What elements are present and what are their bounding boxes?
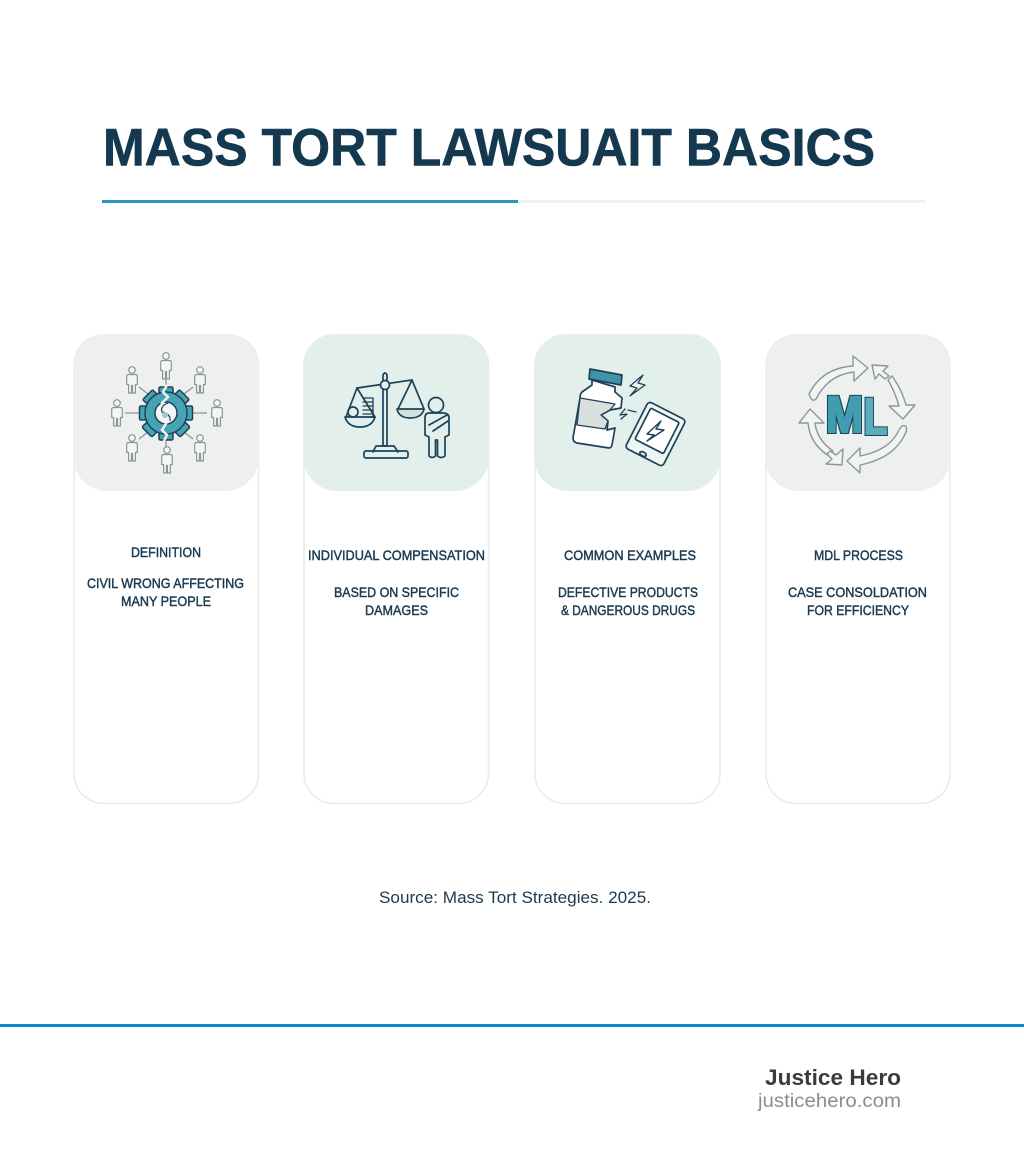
footer brand (757, 1065, 901, 1112)
panel: definition (73, 334, 259, 804)
text: compensation: DAMAGES (365, 603, 428, 618)
text: mdl: FOR EFFICIENCY (807, 603, 909, 618)
text: definition: MANY PEOPLE (121, 594, 211, 609)
text: examples: & DANGEROUS DRUGS (561, 603, 695, 618)
card outline: mdl (766, 335, 950, 804)
source line: Source: Mass Tort Strategies. 2025. (379, 889, 651, 907)
icon: cycle arrows with ML (799, 356, 915, 473)
text: compensation (308, 548, 485, 618)
icon: gear and people (112, 353, 222, 473)
text: examples: COMMON EXAMPLES (564, 548, 696, 563)
text: mdl (788, 548, 927, 618)
icon: scales and person (345, 373, 449, 458)
icon: cycle arrows with ML: L (864, 388, 887, 445)
panel: common examples (534, 334, 721, 804)
text: definition: DEFINITION (131, 545, 201, 560)
card outline: definition (74, 335, 258, 804)
text: mdl: MDL PROCESS (814, 548, 903, 563)
footer rule (0, 1024, 1024, 1027)
text: definition (87, 545, 244, 609)
footer brand: justicehero.com (757, 1090, 901, 1112)
panel: mdl process (765, 334, 951, 804)
title: MASS TORT LAWSUAIT BASICS (103, 118, 875, 178)
text: mdl: CASE CONSOLDATION (788, 585, 927, 600)
icon tile: examples (534, 334, 721, 491)
text: compensation: INDIVIDUAL COMPENSATION (308, 548, 485, 563)
icon: broken bottle and phone (573, 369, 686, 467)
icon: cycle arrows with ML: M (826, 386, 863, 443)
panel: individual compensation (303, 334, 489, 804)
text: compensation: BASED ON SPECIFIC (334, 585, 459, 600)
card outline: examples (535, 335, 720, 804)
footer brand: Justice Hero (765, 1065, 901, 1090)
text: definition: CIVIL WRONG AFFECTING (87, 576, 244, 591)
text: examples: DEFECTIVE PRODUCTS (558, 585, 698, 600)
icon tile: definition (73, 334, 259, 491)
icon tile: mdl (765, 334, 951, 491)
title underline (102, 200, 925, 203)
card outline: compensation (304, 335, 488, 804)
text: examples (558, 548, 698, 618)
icon tile: compensation (303, 334, 489, 491)
